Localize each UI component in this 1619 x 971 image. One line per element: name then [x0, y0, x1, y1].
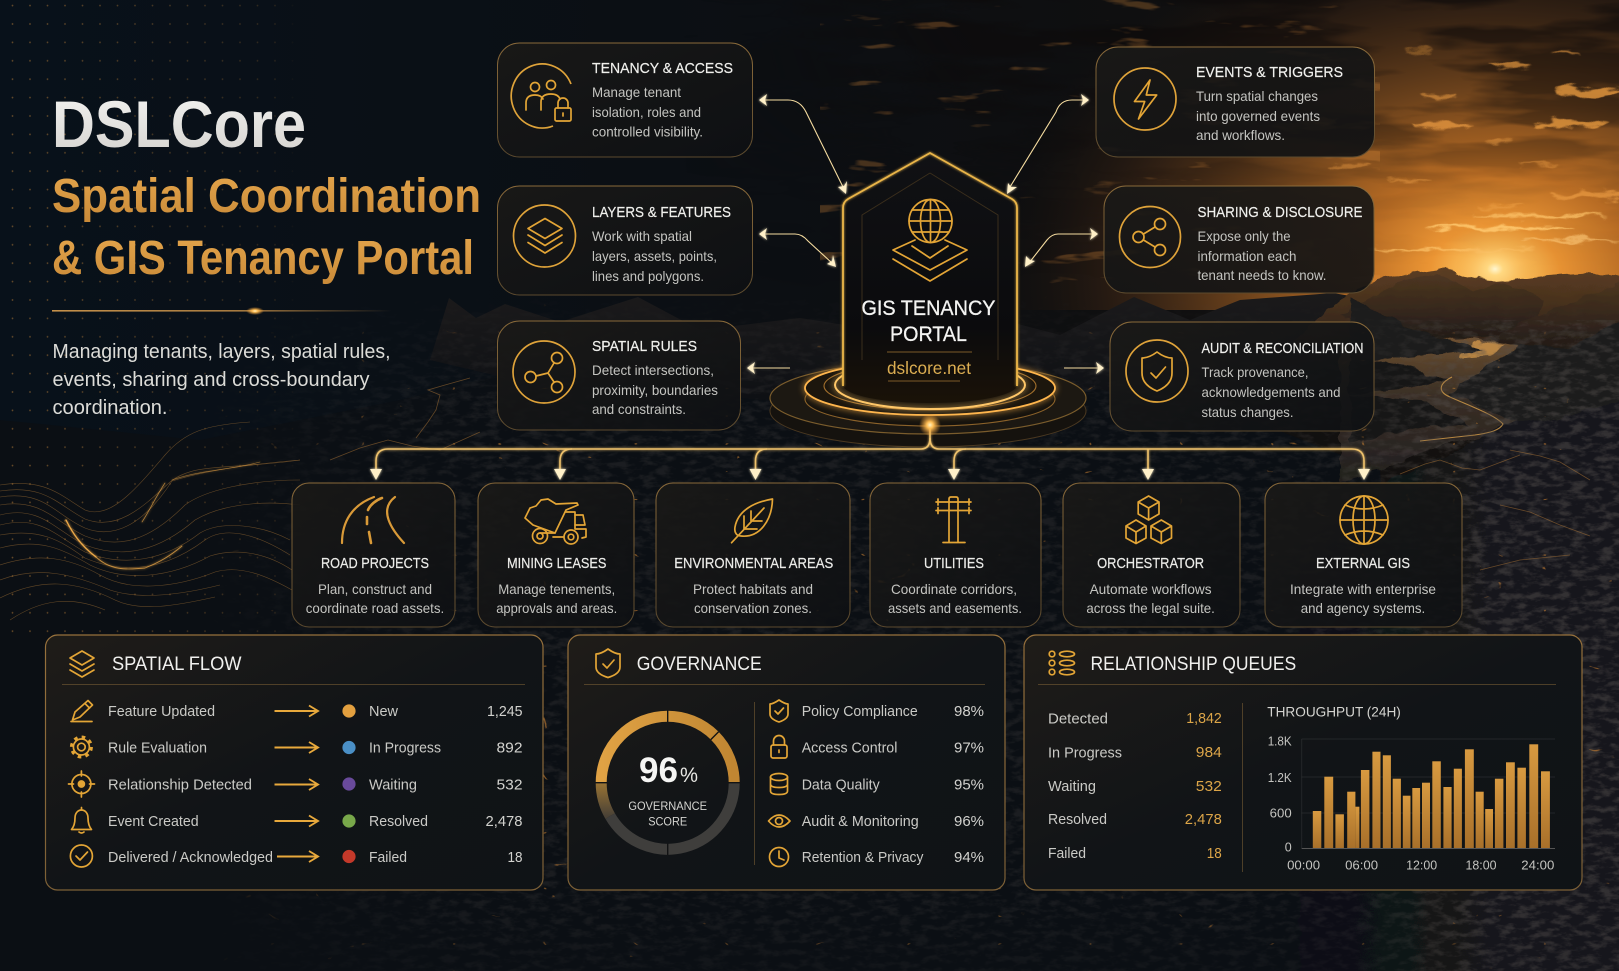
panel: mining leases	[478, 483, 634, 627]
icon: bell	[72, 808, 92, 833]
panel: sharing and disclosure: Expose only the	[1198, 228, 1291, 244]
x axis labels: 12:00	[1406, 858, 1437, 872]
panel: tenancy and access	[498, 43, 752, 157]
icon: road	[342, 497, 404, 543]
portal name: PORTAL	[890, 322, 967, 346]
title: DSLCore: DSLCore	[52, 87, 306, 161]
panel: events and triggers: Turn spatial changes	[1196, 88, 1318, 104]
icon: globe	[1340, 496, 1388, 544]
icon: pencil	[71, 700, 92, 722]
flow steps: Relationship Detected	[108, 776, 252, 794]
panel: utilities: UTILITIES	[924, 556, 984, 572]
panel: audit and reconciliation: AUDIT & RECONCILIATION	[1202, 340, 1364, 357]
icon: utility pole	[936, 497, 971, 542]
panel: tenancy and access: TENANCY & ACCESS	[592, 60, 733, 77]
governance metrics	[768, 700, 984, 866]
panel: external gis: Integrate with enterprise	[1290, 581, 1436, 597]
panel: utilities	[870, 483, 1041, 627]
queue counts: 984	[1196, 744, 1222, 761]
status list: New	[369, 703, 398, 720]
title: Spatial Coordination and GIS Tenancy Portal	[52, 170, 481, 285]
icon: share nodes	[1120, 206, 1180, 268]
icon: clock	[770, 848, 788, 866]
panel: orchestrator: across the legal suite.	[1086, 600, 1215, 616]
icon: spatial flow layers	[70, 651, 94, 677]
icon: target	[68, 771, 94, 797]
panel: events and triggers: into governed events	[1196, 108, 1320, 124]
icon: dump truck	[525, 499, 586, 544]
hub spark	[919, 414, 941, 436]
icon: globe on layers	[893, 200, 967, 281]
queue counts: Failed	[1048, 845, 1086, 862]
heading: spatial flow: SPATIAL FLOW	[112, 654, 242, 675]
panel: orchestrator: ORCHESTRATOR	[1097, 556, 1204, 572]
panel: external gis	[1265, 483, 1462, 627]
connector tree to domain cards	[376, 425, 1364, 472]
icon: policy shield	[770, 700, 788, 722]
queue counts: Resolved	[1048, 811, 1107, 828]
icon: queue list	[1049, 651, 1074, 675]
title: Spatial Coordination and GIS Tenancy Portal: & GIS Tenancy Portal	[52, 232, 474, 285]
status list: In Progress	[369, 740, 441, 756]
queue counts: 2,478	[1185, 811, 1222, 828]
panel: mining leases: Manage tenements,	[498, 581, 615, 597]
portal name	[862, 296, 996, 346]
panel: environmental areas: ENVIRONMENTAL AREAS	[674, 556, 833, 572]
icon: eye	[768, 815, 790, 827]
flow steps: Rule Evaluation	[108, 740, 207, 756]
decorative contour wave lines	[0, 422, 300, 620]
icon: spatial graph	[513, 341, 575, 403]
flow arrows	[274, 706, 318, 862]
chart heading: THROUGHPUT (24H)	[1267, 704, 1401, 720]
governance metrics: 95%	[954, 776, 984, 794]
y axis labels	[1268, 735, 1292, 855]
portal shield	[843, 153, 1017, 403]
governance metrics: Access Control	[802, 740, 897, 756]
icon: lightning bolt	[1114, 68, 1176, 130]
x axis labels: 06:00	[1345, 858, 1378, 872]
panel: tenancy and access: isolation, roles and	[592, 104, 701, 120]
panel: spatial flow	[46, 635, 543, 890]
portal name: GIS TENANCY	[862, 296, 996, 320]
x axis labels: 18:00	[1466, 858, 1497, 872]
panel: mining leases: MINING LEASES	[507, 556, 606, 572]
status list	[342, 703, 522, 866]
status list: 18	[508, 849, 522, 866]
status list: 1,245	[487, 703, 522, 720]
panel: layers and features	[498, 186, 752, 295]
flow steps: Feature Updated	[108, 703, 215, 720]
panel: orchestrator	[1063, 483, 1240, 627]
governance score donut: SCORE	[648, 815, 687, 829]
panel: spatial rules: SPATIAL RULES	[592, 338, 697, 355]
heading: governance: GOVERNANCE	[637, 654, 762, 675]
subtitle: coordination.	[52, 397, 168, 419]
panel: spatial rules: proximity, boundaries	[592, 382, 718, 398]
status list: 2,478	[486, 813, 522, 830]
subtitle: Managing tenants, layers, spatial rules,	[52, 341, 390, 363]
panel: spatial rules	[498, 321, 740, 430]
icon: stacked layers	[514, 205, 576, 267]
panel: audit and reconciliation: status changes.	[1202, 404, 1294, 420]
panel: audit and reconciliation: acknowledgements and	[1202, 384, 1340, 400]
subtitle	[52, 341, 390, 419]
panel: layers and features: lines and polygons.	[592, 268, 704, 284]
panel: spatial rules: and constraints.	[592, 401, 686, 417]
x axis labels: 24:00	[1521, 858, 1554, 872]
panel: utilities: assets and easements.	[888, 600, 1022, 616]
panel: audit and reconciliation: Track provenance,	[1202, 364, 1308, 380]
connector arrowheads	[370, 469, 1370, 480]
panel: governance	[568, 635, 1005, 890]
panel: mining leases: approvals and areas.	[496, 600, 617, 616]
icon: governance shield	[596, 649, 620, 678]
panel: relationship queues	[1024, 635, 1582, 890]
panel: layers and features: LAYERS & FEATURES	[592, 204, 731, 221]
x axis labels: 00:00	[1287, 858, 1320, 872]
queue counts: 1,842	[1186, 710, 1222, 727]
bar chart: throughput	[1268, 735, 1555, 872]
status list: 532	[496, 776, 522, 794]
queue counts: Detected	[1048, 711, 1108, 728]
queue counts: In Progress	[1048, 745, 1122, 762]
governance metrics: Audit & Monitoring	[802, 813, 919, 830]
queue counts	[1048, 710, 1222, 862]
panel: layers and features: layers, assets, points,	[592, 248, 717, 264]
x axis labels	[1287, 858, 1554, 872]
arrows between portal and feature cards	[752, 100, 1098, 368]
icon: check circle	[70, 845, 92, 867]
governance metrics: 94%	[954, 849, 984, 866]
governance metrics: 98%	[954, 703, 984, 720]
queue counts: 532	[1196, 778, 1222, 795]
y axis labels: 1.2K	[1268, 771, 1292, 785]
governance metrics: Policy Compliance	[802, 703, 918, 720]
governance score donut: %	[680, 764, 698, 787]
panel: layers and features: Work with spatial	[592, 228, 692, 244]
status list: 892	[496, 740, 522, 756]
subtitle: events, sharing and cross-boundary	[52, 369, 370, 391]
panel: sharing and disclosure	[1104, 186, 1374, 293]
flow steps	[68, 700, 273, 867]
platform under portal	[770, 361, 1086, 447]
panel: road projects: ROAD PROJECTS	[321, 556, 429, 572]
decorative dot grid	[0, 0, 300, 640]
panel: environmental areas: conservation zones.	[694, 600, 812, 616]
title: Spatial Coordination and GIS Tenancy Portal: Spatial Coordination	[52, 170, 481, 223]
panel: sharing and disclosure: SHARING & DISCLOSURE	[1198, 204, 1362, 221]
governance score donut: GOVERNANCE	[628, 799, 707, 813]
panel: utilities: Coordinate corridors,	[891, 581, 1017, 597]
panel: external gis: and agency systems.	[1301, 600, 1425, 616]
governance metrics: Data Quality	[802, 776, 880, 794]
panel: external gis: EXTERNAL GIS	[1316, 556, 1410, 572]
panel: environmental areas	[656, 483, 850, 627]
title divider with spark	[52, 307, 392, 315]
status list: Failed	[369, 849, 407, 866]
icon: leaf	[732, 499, 772, 543]
panel: road projects: coordinate road assets.	[306, 600, 444, 616]
panel: tenancy and access: controlled visibility.	[592, 124, 703, 140]
y axis labels: 0	[1285, 841, 1292, 855]
governance metrics: 96%	[954, 813, 984, 830]
y axis labels: 600	[1270, 807, 1292, 821]
icon: three cubes	[1126, 496, 1172, 544]
panel: environmental areas: Protect habitats and	[693, 581, 813, 597]
panel: sharing and disclosure: information each	[1198, 248, 1296, 264]
governance metrics: 97%	[954, 740, 984, 756]
status list: Waiting	[369, 776, 417, 794]
score value: 96	[639, 751, 678, 790]
portal url: dslcore.net	[887, 358, 971, 378]
panel: audit and reconciliation	[1110, 322, 1374, 431]
glowing contour highlight	[66, 462, 260, 569]
arrow heads	[747, 94, 1104, 374]
queue counts: Waiting	[1048, 778, 1096, 795]
panel: tenancy and access: Manage tenant	[592, 84, 681, 100]
icon: padlock	[771, 736, 787, 758]
status list: Resolved	[369, 813, 428, 830]
governance score donut	[596, 710, 740, 856]
heading: relationship queues: RELATIONSHIP QUEUES	[1090, 654, 1296, 675]
icon: gear	[71, 737, 91, 757]
panel: sharing and disclosure: tenant needs to know.	[1198, 267, 1326, 283]
panel: road projects: Plan, construct and	[318, 581, 432, 597]
icon: database	[770, 774, 788, 794]
flow steps: Event Created	[108, 813, 199, 830]
panel: road projects	[292, 483, 455, 627]
y axis labels: 1.8K	[1268, 735, 1292, 749]
governance metrics: Retention & Privacy	[802, 849, 924, 866]
icon: tenants with lock	[511, 64, 571, 128]
panel: orchestrator: Automate workflows	[1090, 581, 1212, 597]
panel: events and triggers: and workflows.	[1196, 127, 1285, 143]
panel: events and triggers: EVENTS & TRIGGERS	[1196, 64, 1343, 81]
panel: events and triggers	[1096, 47, 1374, 157]
queue counts: 18	[1207, 845, 1222, 862]
flow steps: Delivered / Acknowledged	[108, 849, 273, 866]
panel: spatial rules: Detect intersections,	[592, 362, 714, 378]
icon: shield check	[1126, 340, 1188, 402]
